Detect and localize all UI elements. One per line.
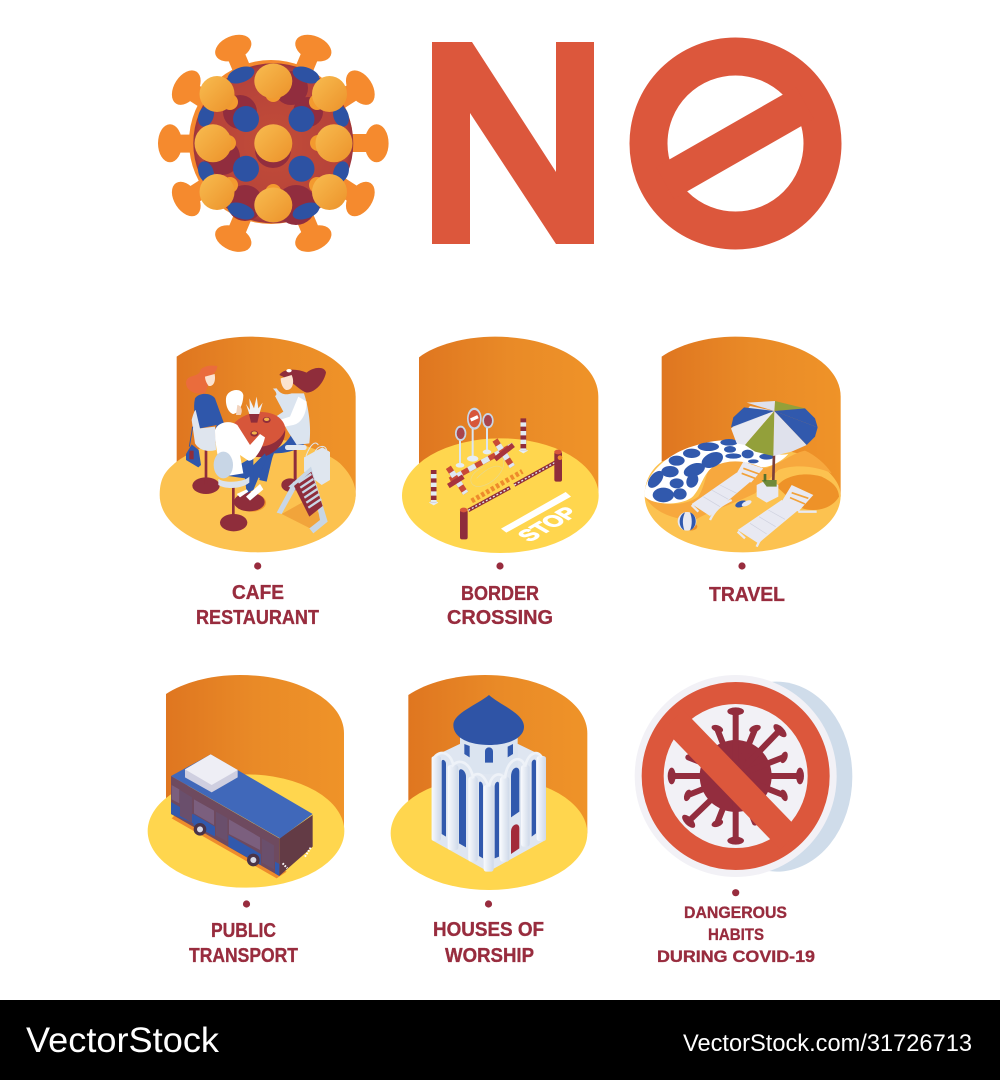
umbrella shadow [777, 474, 839, 510]
floor [402, 438, 599, 553]
striped bollards [429, 418, 528, 505]
beach ball [678, 512, 697, 531]
wall [177, 337, 356, 497]
columns [432, 756, 546, 872]
bus [171, 754, 313, 878]
title: prohibition sign as letter O [648, 56, 822, 230]
prohibition ring and bar [653, 693, 819, 859]
darker wet sand [645, 451, 832, 520]
label: cafe restaurant: RESTAURANT [196, 607, 319, 629]
label: border crossing: CROSSING [447, 607, 553, 629]
traffic cones [472, 471, 522, 501]
side table with drinks [757, 474, 778, 503]
label: dangerous habits: HABITS [708, 925, 764, 944]
watermark image id: VectorStock.com/31726713 [683, 1030, 972, 1057]
label: travel: TRAVEL [709, 584, 785, 606]
man in the foreground [214, 390, 267, 501]
church building [432, 695, 546, 872]
wall [419, 337, 598, 497]
sea with foam and pebbles [645, 439, 788, 503]
no-entry signs [455, 408, 494, 468]
stools and table bases [192, 450, 299, 531]
wall [408, 675, 587, 833]
floor [160, 438, 356, 552]
label: cafe restaurant: CAFE [232, 582, 284, 604]
arches [434, 753, 542, 787]
woman on the right [254, 368, 326, 482]
label: dangerous habits: DURING COVID-19 [657, 947, 815, 966]
wall [662, 337, 841, 497]
wall [166, 675, 344, 833]
stop road marking: STOP [511, 503, 584, 545]
panel: border crossing [402, 337, 599, 553]
menu board [277, 467, 328, 533]
label: travel [709, 562, 785, 606]
crossed road barriers [448, 440, 513, 493]
panel: virus prohibition sign [635, 675, 852, 877]
title: letter N of NO [432, 42, 594, 244]
label: border crossing: BORDER [461, 583, 539, 605]
panel: travel beach [645, 337, 841, 552]
floor [391, 777, 587, 890]
label: border crossing [447, 562, 553, 629]
watermark logo text: VectorStock [26, 1021, 220, 1060]
label: dangerous habits: DANGEROUS [684, 903, 787, 922]
dome [453, 695, 524, 745]
razor wire [470, 457, 504, 487]
stop road marking [501, 492, 584, 545]
sign back [701, 682, 852, 872]
label: public transport: TRANSPORT [189, 945, 298, 967]
icon: coronavirus [158, 30, 389, 257]
windows [442, 760, 536, 858]
panel: houses of worship [391, 675, 587, 890]
beach umbrella [731, 401, 818, 480]
sign face [635, 675, 837, 877]
label: dangerous habits [657, 889, 815, 966]
woman on the left [186, 366, 224, 467]
footer bar [0, 1000, 1000, 1080]
drum [460, 735, 518, 774]
sun lounger left [692, 462, 763, 520]
panel: public transport [148, 675, 344, 888]
label: houses of worship: HOUSES OF [433, 919, 544, 941]
boom gate [460, 450, 562, 539]
label: houses of worship: WORSHIP [445, 945, 534, 967]
label: houses of worship [433, 900, 544, 967]
label: public transport: PUBLIC [211, 920, 276, 942]
label: public transport [189, 900, 298, 967]
slippers [734, 499, 752, 509]
panel: cafe restaurant [160, 337, 356, 552]
shopping bag [304, 443, 330, 485]
virus [668, 707, 804, 845]
floor [148, 774, 344, 888]
table with plant and cups [223, 397, 291, 462]
label: cafe restaurant [196, 562, 319, 629]
sand [645, 448, 841, 552]
sun lounger right [738, 485, 817, 547]
